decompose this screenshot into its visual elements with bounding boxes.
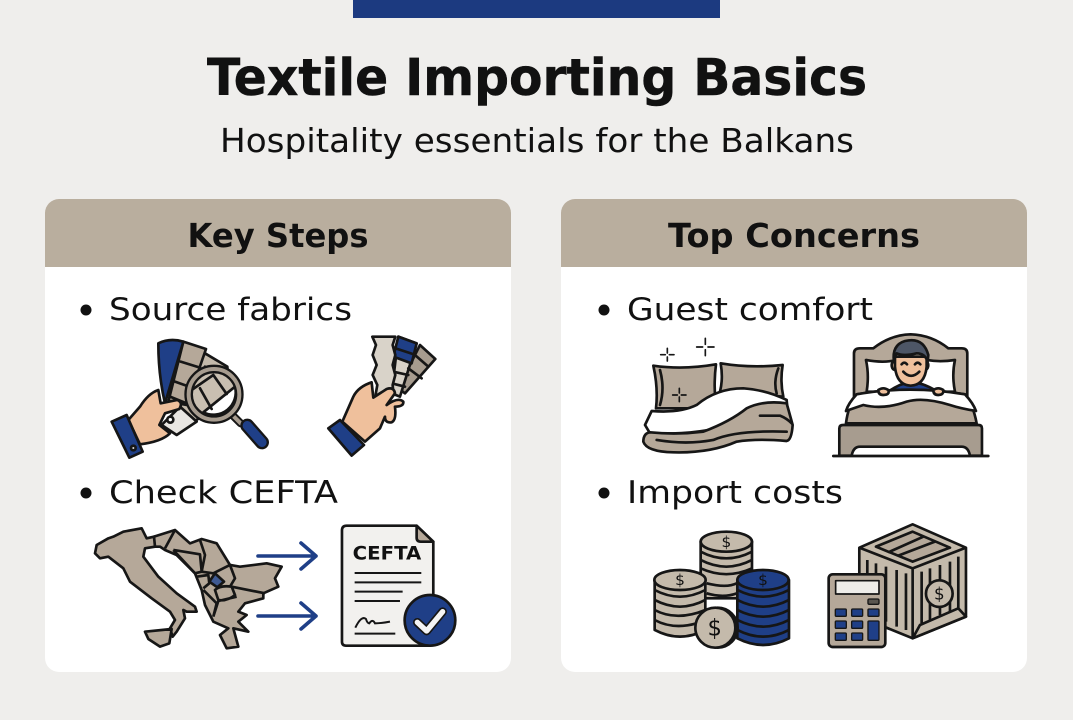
bullet: import costs: Import costs bbox=[627, 475, 843, 511]
panel header: top concerns bbox=[561, 199, 1027, 267]
icon: coin stacks bbox=[654, 532, 789, 648]
bullet: guest comfort: Guest comfort bbox=[627, 292, 873, 328]
icon: coin stacks: $ bbox=[707, 616, 722, 642]
icon: coin stacks: $ bbox=[721, 533, 731, 551]
icon: folded bedding with pillows bbox=[643, 338, 793, 452]
icon: shipping crate: $ bbox=[934, 585, 945, 604]
bullet: source fabrics: Source fabrics bbox=[109, 292, 352, 328]
icon: CEFTA document with check badge: CEFTA bbox=[353, 544, 422, 565]
icon: CEFTA document with check badge bbox=[342, 526, 455, 646]
arrows: to CEFTA document bbox=[258, 543, 316, 629]
panel header: top concerns: Top Concerns bbox=[668, 216, 920, 255]
subtitle: Hospitality essentials for the Balkans bbox=[220, 121, 854, 160]
panel header: key steps: Key Steps bbox=[188, 216, 368, 255]
icon: map of Italy and the Balkans bbox=[95, 528, 282, 648]
icon: shipping crate bbox=[859, 524, 966, 638]
bullet: check CEFTA: Check CEFTA bbox=[109, 475, 338, 511]
icon: guest smiling in bed bbox=[833, 334, 988, 456]
icon: coin stacks: $ bbox=[758, 571, 768, 589]
title: Textile Importing Basics bbox=[207, 49, 867, 108]
top accent bar bbox=[353, 0, 720, 18]
icon: coin stacks: $ bbox=[675, 571, 685, 589]
icon: hand with fabric swatches under magnifier bbox=[112, 340, 262, 458]
panel: key steps bbox=[45, 199, 511, 672]
icon: calculator bbox=[829, 574, 885, 647]
panel header: key steps bbox=[45, 199, 511, 267]
icon: hand holding fabric swatches bbox=[328, 337, 435, 456]
panel: top concerns bbox=[561, 199, 1027, 672]
